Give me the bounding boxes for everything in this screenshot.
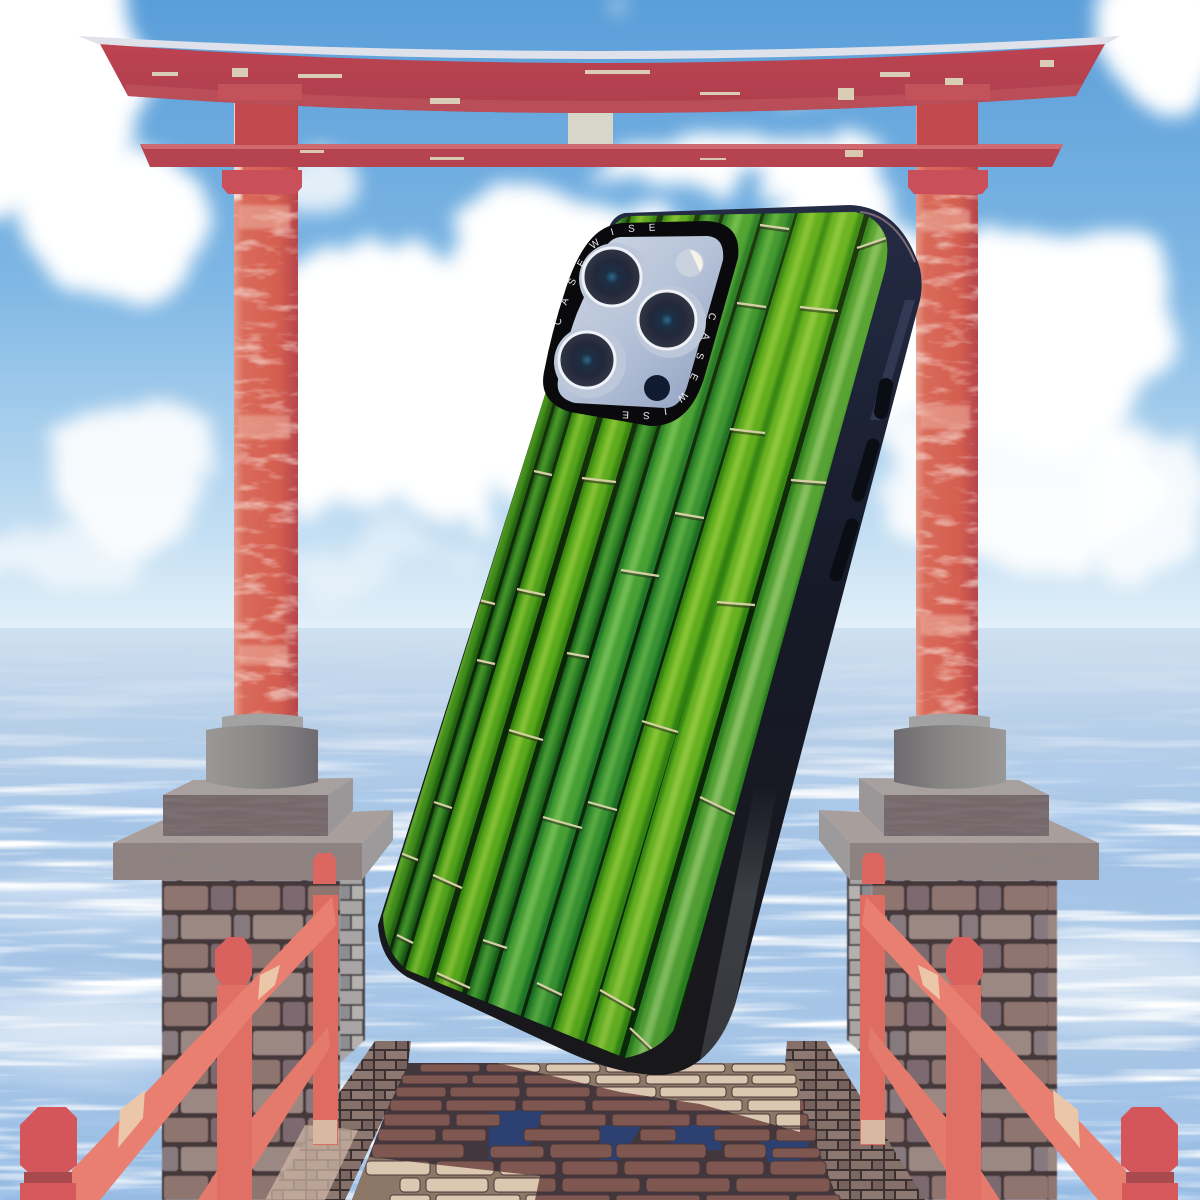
upper plinth (163, 778, 353, 836)
bamboo stem I (585, 190, 853, 1100)
cloud: top left (0, 0, 355, 305)
lens top (579, 243, 651, 315)
bamboo stem G (524, 213, 796, 1028)
bamboo stem D (434, 214, 696, 992)
puddles (352, 1110, 810, 1200)
right pier extension (1048, 880, 1057, 1200)
paving stones (352, 1060, 852, 1200)
drum (206, 714, 318, 789)
left pillar (232, 100, 298, 718)
slab (113, 810, 393, 880)
bamboo stem A (383, 394, 553, 948)
bamboo stem H (546, 190, 822, 1100)
bamboo stem F (488, 214, 762, 1016)
cloud: right mass (890, 225, 1200, 575)
bamboo print (383, 212, 888, 1058)
pier front bricks (162, 880, 340, 1200)
flash (676, 249, 704, 277)
right stone base and brick pier (819, 714, 1099, 1200)
left curb (265, 1041, 411, 1200)
bamboo node shadows (397, 228, 886, 1052)
cloud: centre mass (275, 143, 940, 540)
bamboo tint (522, 212, 887, 1054)
right pillar (916, 100, 978, 718)
bamboo stem E (466, 214, 720, 1002)
right railing (860, 853, 1178, 1200)
back post (313, 853, 338, 1145)
lower beam (140, 144, 1063, 167)
phone with bamboo case (378, 205, 922, 1075)
clouds (0, 0, 1200, 592)
bamboo nodes (397, 225, 886, 1050)
front post (20, 1107, 77, 1200)
torii gate (78, 36, 1120, 718)
top beam (78, 36, 1120, 113)
upper rail (72, 897, 336, 1200)
walkway floor (352, 1063, 850, 1200)
central strut (568, 103, 613, 145)
camera ring (543, 221, 738, 426)
right curb (785, 1041, 925, 1200)
brand text bottom: CASEWISE (622, 313, 716, 420)
left railing (20, 853, 338, 1200)
side reflection (700, 212, 915, 1060)
cloud: lower left (0, 395, 460, 592)
lens right (634, 286, 706, 358)
shaded stones (366, 1064, 840, 1200)
phone shadow body (378, 205, 922, 1075)
pillar collars (222, 100, 988, 194)
left stone base and brick pier (113, 714, 393, 1200)
bamboo stem B (392, 216, 628, 966)
sunlit stones (352, 1063, 800, 1200)
bamboo stem C (406, 216, 658, 979)
sky background (0, 0, 1200, 630)
side buttons (836, 385, 886, 575)
brand text top: CASEWISE (554, 224, 656, 325)
lower rail (198, 1027, 330, 1200)
stone walkway (265, 1041, 925, 1200)
pier side (340, 850, 365, 1063)
lens bottom (554, 326, 626, 398)
lidar dot (644, 375, 670, 401)
bamboo stem J (629, 190, 897, 1100)
camera plate (558, 236, 723, 408)
cloud: top right (591, 0, 1200, 115)
water (0, 628, 1200, 1200)
mid post (215, 937, 252, 1200)
